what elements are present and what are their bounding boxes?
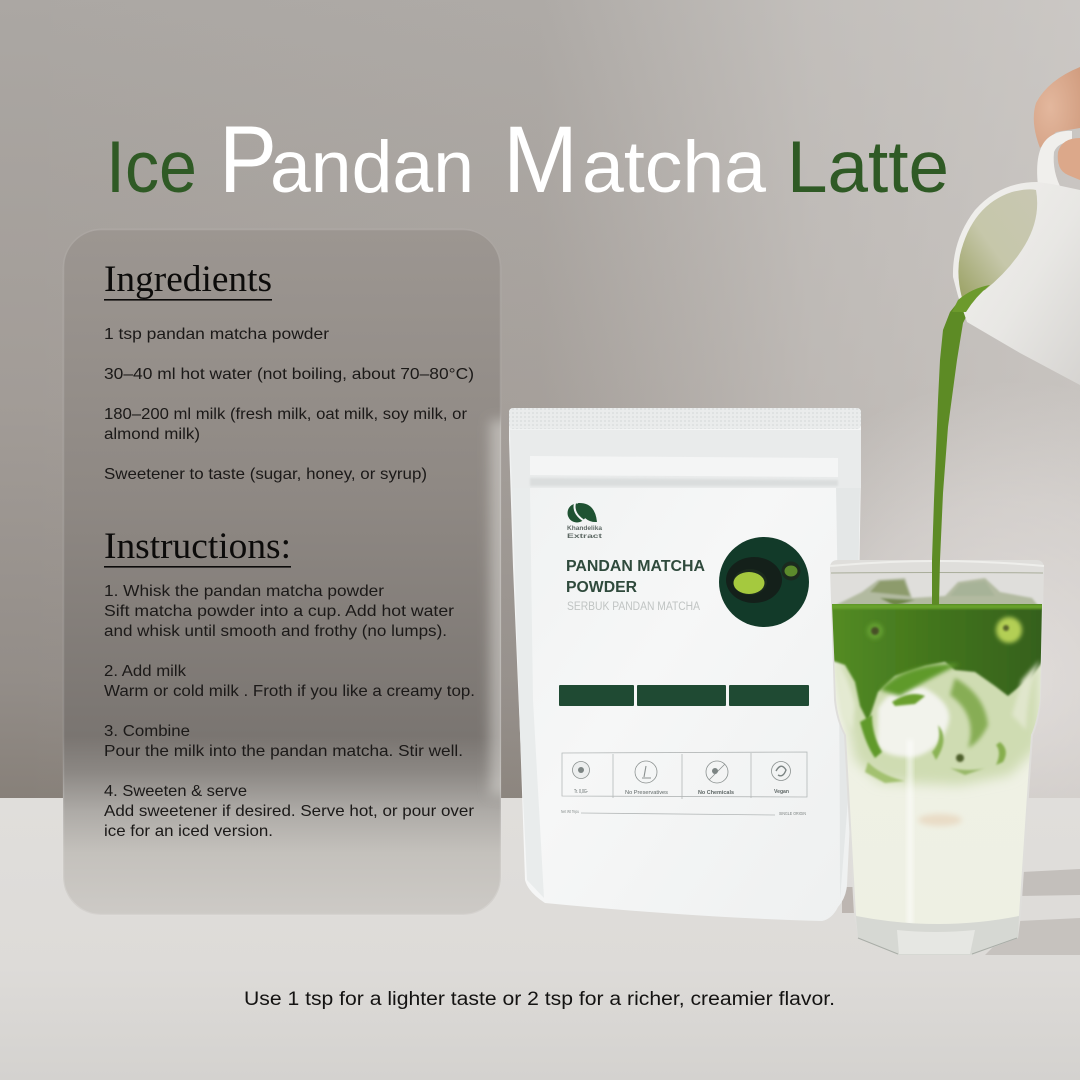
instructions steps: ice for an iced version. xyxy=(104,823,273,840)
icon: vegan xyxy=(772,762,790,795)
ingredients list: 1 tsp pandan matcha powder xyxy=(104,326,330,343)
icon: no chemicals xyxy=(698,761,734,796)
net weight line: SINGLE ORIGIN xyxy=(779,811,806,816)
instructions steps: Warm or cold milk . Froth if you like a creamy top. xyxy=(104,683,475,700)
ingredients list xyxy=(104,326,474,483)
heading: instructions: Instructions: xyxy=(104,526,291,567)
product name: SERBUK PANDAN MATCHA xyxy=(567,601,700,613)
matcha stream xyxy=(932,287,988,605)
icon: no sugar xyxy=(572,762,590,795)
glass base xyxy=(856,916,1019,955)
instructions steps: Add sweetener if desired. Serve hot, or pour over xyxy=(104,803,475,820)
product name: PANDAN MATCHA xyxy=(566,558,705,575)
swirls of matcha and milk xyxy=(840,670,856,726)
panel: recipe card xyxy=(63,229,512,915)
ingredients list: 30–40 ml hot water (not boiling, about 70–80°C) xyxy=(104,366,474,383)
pitcher handle xyxy=(1037,131,1072,190)
product name: POWDER xyxy=(566,579,637,596)
instructions steps: 3. Combine xyxy=(104,723,190,740)
milk and matcha layers xyxy=(830,600,1046,930)
instructions steps: and whisk until smooth and frothy (no lumps). xyxy=(104,623,447,640)
instructions steps: Pour the milk into the pandan matcha. Stir well. xyxy=(104,743,463,760)
footer note: Use 1 tsp for a lighter taste or 2 tsp for a richer, creamier flavor. xyxy=(244,989,835,1010)
pitcher body xyxy=(953,182,1080,385)
net weight line: Net Wt Tepu xyxy=(561,809,579,814)
icon: no preservatives xyxy=(625,761,669,796)
glass body xyxy=(830,560,1044,955)
instructions steps: 1. Whisk the pandan matcha powder xyxy=(104,583,385,600)
instructions steps: 4. Sweeten & serve xyxy=(104,783,247,800)
heading: ingredients: Ingredients xyxy=(104,259,272,300)
product pouch xyxy=(509,408,861,921)
product name xyxy=(566,558,705,613)
instructions steps xyxy=(104,583,475,840)
brand logo: Khandelika xyxy=(567,525,602,532)
glass of iced matcha latte xyxy=(830,560,1046,955)
pitcher xyxy=(952,131,1080,385)
icon: no preservatives: No Preservatives xyxy=(625,790,669,796)
fingers over handle xyxy=(1058,138,1080,180)
title: atcha xyxy=(582,127,766,208)
icon: vegan: Vegan xyxy=(774,789,789,795)
air bubbles xyxy=(867,617,1022,643)
brand logo xyxy=(567,503,603,540)
ice cubes xyxy=(834,578,1040,608)
title: P xyxy=(219,107,277,213)
matcha at the spout xyxy=(952,285,990,312)
title: M xyxy=(503,107,578,213)
icon: no sugar: Tr. 0,0G- xyxy=(574,789,588,795)
pitcher mouth xyxy=(958,189,1037,298)
hand xyxy=(1034,67,1080,148)
glass rim xyxy=(830,561,1044,566)
icon table xyxy=(562,752,807,799)
matcha bowl photo xyxy=(719,537,809,627)
icon: no chemicals: No Chemicals xyxy=(698,790,734,796)
ingredients list: Sweetener to taste (sugar, honey, or syrup) xyxy=(104,466,427,483)
title: Ice xyxy=(106,127,197,208)
instructions steps: Sift matcha powder into a cup. Add hot water xyxy=(104,603,455,620)
net weight line xyxy=(561,809,806,816)
ingredients list: 180–200 ml milk (fresh milk, oat milk, soy milk, or xyxy=(104,406,468,423)
title xyxy=(106,107,949,213)
colour bars xyxy=(559,685,809,706)
instructions steps: 2. Add milk xyxy=(104,663,187,680)
milky green transition xyxy=(836,660,1040,785)
ingredients list: almond milk) xyxy=(104,426,200,443)
pouch body xyxy=(509,408,861,921)
title: Latte xyxy=(787,127,949,208)
dark matcha top layer xyxy=(830,600,1044,722)
brand logo: Extract xyxy=(567,533,603,540)
title: andan xyxy=(270,127,474,208)
